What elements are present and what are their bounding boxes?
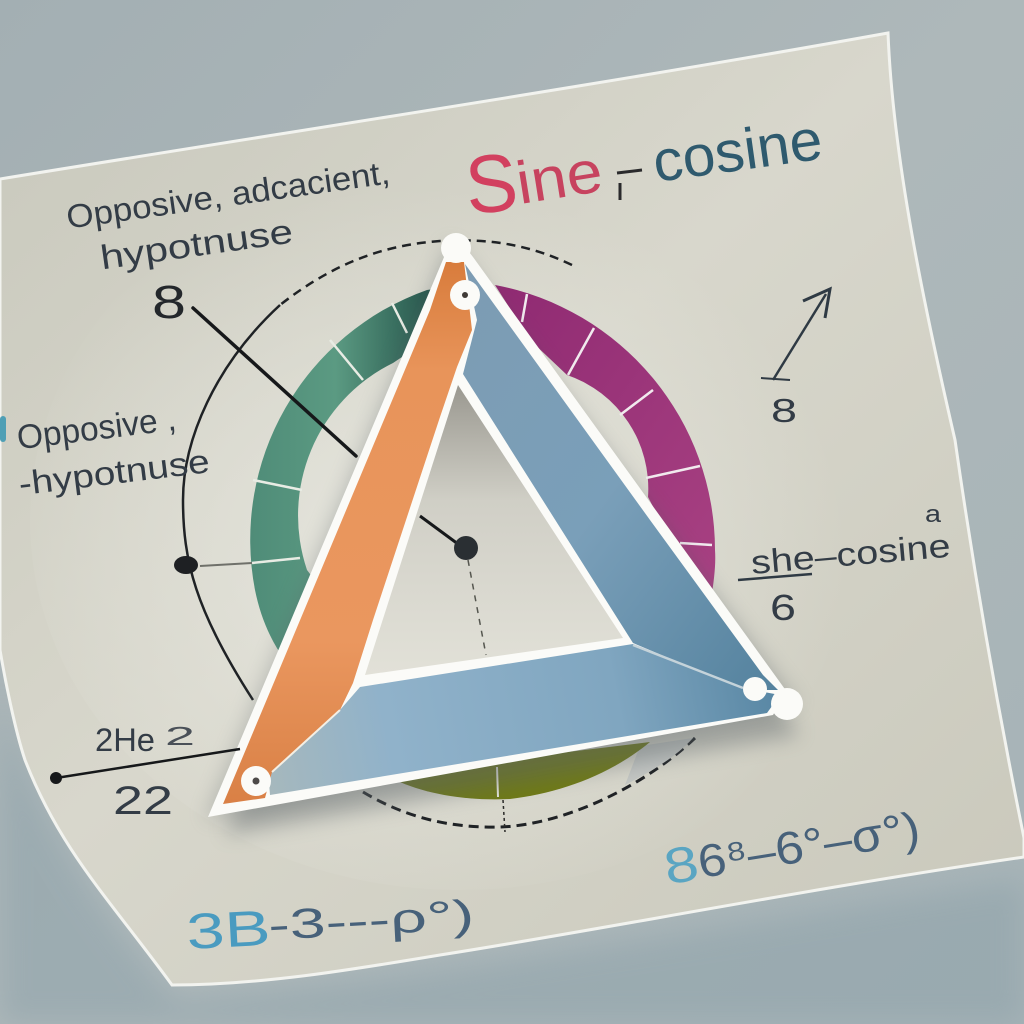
- paper shadow: [0, 700, 1024, 1024]
- inner triangle fill: [365, 385, 623, 675]
- left side: orange: [223, 262, 472, 804]
- label: opposite adjacent hypotenuse: Opposive, adcacient,: [64, 154, 392, 236]
- title: cosine: [649, 107, 826, 195]
- vertex dots: [441, 233, 471, 263]
- bottom tick of dashed circle: [503, 800, 505, 832]
- bottom side: blue: [268, 644, 780, 795]
- ring shadow gap under olive: [625, 738, 693, 785]
- arrow top right: [761, 289, 830, 380]
- formula bottom right: [660, 800, 924, 895]
- arrow label: 8: [771, 392, 797, 429]
- label: opposive hypotnuse: [11, 397, 211, 502]
- ring: magenta segment: [495, 285, 715, 600]
- orange edge highlight: [272, 710, 340, 772]
- title: [462, 107, 826, 232]
- leader line to label 3: [193, 308, 356, 456]
- formula bottom left: 3B: [185, 900, 272, 960]
- inner center line and dot: [420, 516, 486, 655]
- fraction left: 2: [165, 721, 195, 751]
- label: opposite adjacent hypotenuse: [64, 154, 398, 281]
- formula bottom left: -3---ρ°): [267, 891, 475, 949]
- fraction right: a: [925, 501, 942, 528]
- fraction right: [738, 501, 952, 628]
- dashed circle: [183, 240, 695, 827]
- formula bottom right: 8: [660, 835, 702, 895]
- formula bottom left: [185, 889, 476, 960]
- title: S: [462, 137, 521, 232]
- fraction left: 2He: [95, 722, 155, 758]
- triangle: [208, 233, 803, 817]
- label: opposite adjacent hypotenuse: hypotnuse: [98, 213, 295, 277]
- fraction right: 6: [770, 587, 796, 628]
- label: opposive hypotnuse: Opposive ,: [15, 400, 178, 457]
- label: opposive hypotnuse: -hypotnuse: [16, 442, 211, 502]
- fraction left: [50, 721, 240, 823]
- triangle white outline: [208, 234, 787, 817]
- left radius dot: [174, 556, 252, 574]
- fraction right: she–cosine: [749, 527, 952, 581]
- blue edge mark: [0, 416, 6, 442]
- ring: green segment: [250, 288, 440, 660]
- formula bottom right: 6⁸–6°–σ°): [694, 801, 923, 888]
- number 3 label: 8: [152, 276, 186, 328]
- title: ine: [512, 137, 607, 217]
- triangle shadow: [205, 240, 800, 835]
- ring: olive segment: [400, 742, 650, 799]
- fraction left: 22: [113, 779, 173, 823]
- divider between blue sides: [633, 645, 743, 688]
- right side: blue: [463, 264, 778, 690]
